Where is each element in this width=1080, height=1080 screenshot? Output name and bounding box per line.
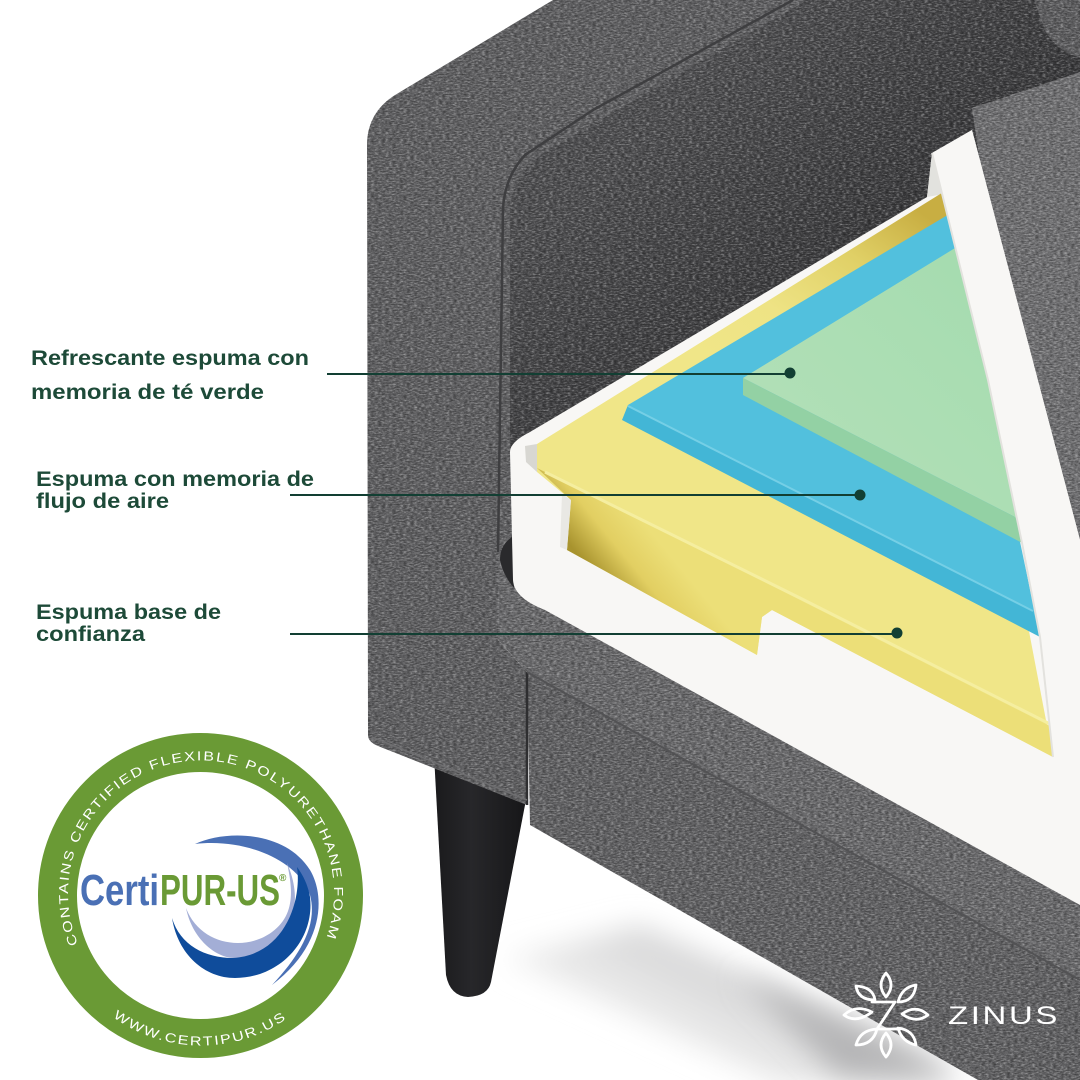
ring text top: CONTAINS CERTIFIED FLEXIBLE POLYURETHANE FOAM: [59, 751, 343, 946]
logo wordmark: ZINUS: [948, 1002, 1060, 1030]
blue top surface: [628, 213, 1040, 637]
arm seams: [372, 0, 1080, 980]
layer: base foam yellow: [525, 191, 1053, 757]
label text: Espuma con memoria de: [36, 468, 314, 491]
blue front face: [622, 405, 1040, 637]
swoosh dark: [172, 867, 310, 978]
leader line: [290, 494, 860, 496]
dark shadow near sofa: [740, 975, 960, 1075]
registered mark: ®: [279, 873, 287, 884]
green front face: [743, 378, 1026, 545]
layer: air flow foam blue: [622, 213, 1040, 637]
label: air flow memory foam: [36, 468, 866, 513]
right seat cushion fabric: [972, 72, 1080, 560]
logo mark: [844, 973, 928, 1057]
foam cover white: [510, 130, 1080, 905]
layer: green tea foam: [743, 245, 1026, 545]
sofa leg: [434, 755, 525, 997]
yellow edge highlight: [545, 472, 1050, 724]
yellow top surface: [537, 191, 1053, 757]
label text: memoria de té verde: [31, 381, 264, 404]
sofa arm: [367, 0, 807, 805]
marker dot: [892, 628, 902, 638]
ring text bottom: WWW.CERTIPUR.US: [116, 1010, 284, 1046]
notch shadow: [525, 444, 537, 472]
CertiPUR-US badge: [38, 733, 363, 1058]
swoosh light: [186, 863, 295, 958]
logo word PUR-US: PUR-US: [160, 866, 280, 915]
foam cover inner shade: [927, 153, 944, 197]
pillow corner: [1034, 0, 1080, 58]
label: base foam: [36, 601, 902, 646]
leader line: [327, 373, 790, 375]
soft shadow: [505, 925, 960, 1080]
leader line: [290, 633, 897, 635]
foam cover strip shadow edge: [932, 153, 1053, 757]
logo word Certi: Certi: [80, 866, 159, 915]
marker dot: [854, 490, 866, 500]
label text: confianza: [36, 623, 145, 646]
blue edge highlight: [628, 406, 1033, 611]
label text: flujo de aire: [36, 490, 169, 513]
foam cover right strip: [932, 130, 1080, 905]
front lower panel: [527, 670, 1080, 1080]
notch white side: [560, 494, 571, 550]
floor shadow: [505, 925, 960, 1080]
marker dot: [784, 368, 796, 378]
front fabric band: [498, 536, 1080, 980]
label: green tea memory foam: [31, 347, 796, 404]
yellow front face: [537, 468, 1053, 757]
swoosh outer: [195, 836, 319, 985]
sofa back panel: [480, 0, 1080, 640]
label text: Espuma base de: [36, 601, 221, 624]
Zinus logo: [844, 973, 1060, 1057]
badge ring: [58, 752, 344, 1038]
label text: Refrescante espuma con: [31, 347, 309, 370]
sofa upholstery: [367, 0, 1080, 1080]
fabric pocket opening: [500, 537, 514, 588]
green top surface: [743, 245, 1026, 525]
